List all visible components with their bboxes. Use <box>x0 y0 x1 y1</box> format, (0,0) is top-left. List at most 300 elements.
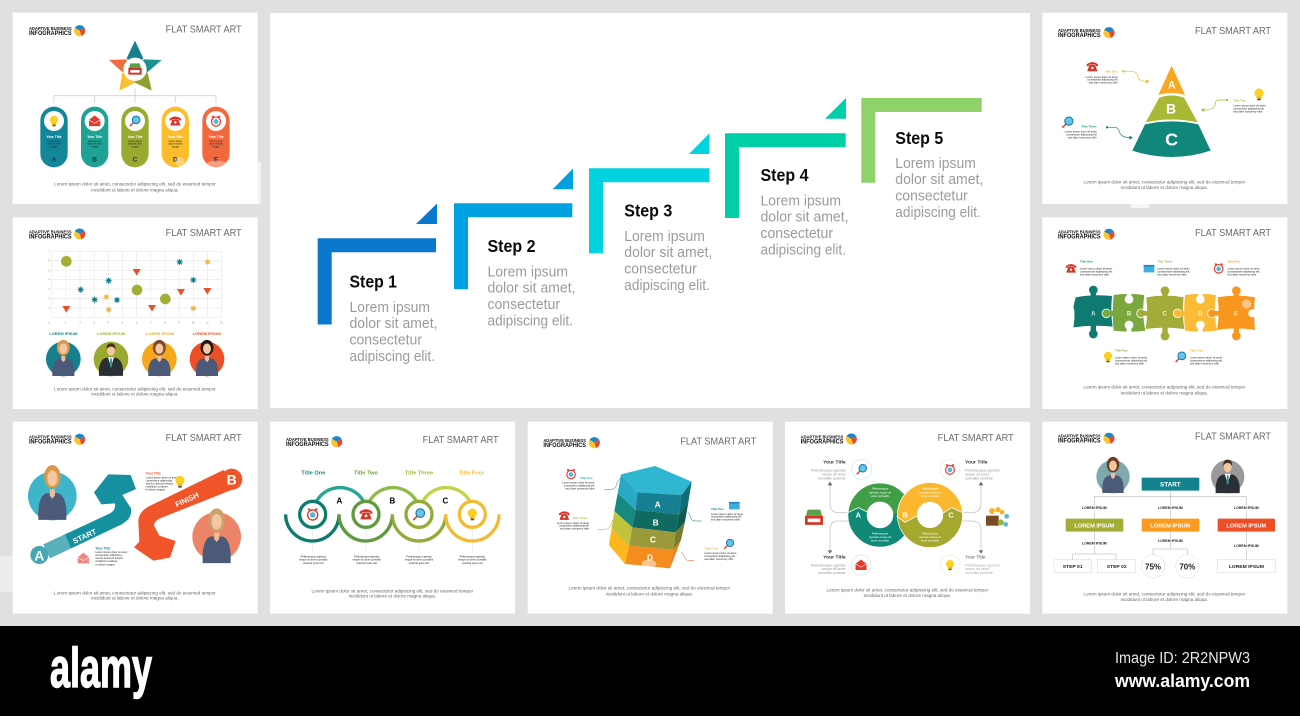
callout: bottom left <box>811 554 871 575</box>
pill B: dolor sit amet <box>88 143 102 146</box>
person 2: LOREM IPSUM <box>97 331 126 336</box>
scatter chart: 1 <box>48 306 50 310</box>
callout top: et dolore magna <box>146 488 165 492</box>
step 2: Step 2 <box>488 236 536 256</box>
callout: title one: consectetur adipiscing elit <box>1087 78 1118 82</box>
logo: INFOGRAPHICS <box>543 443 586 449</box>
callout: title one: consectetuer adipiscing elit, <box>1080 269 1113 273</box>
logo: ADAPTIVE BUSINESS <box>801 434 844 440</box>
callout: title two: Lorem ipsum dolor sit amet, <box>1115 355 1148 359</box>
callout: title one: consectetur adipiscing elit <box>564 483 595 487</box>
callout: top left <box>811 459 872 480</box>
step 5: dolor sit amet, <box>895 171 983 188</box>
person: man <box>1211 460 1244 493</box>
scatter chart: 7 <box>48 249 50 253</box>
callout: title three: Lorem ipsum dolor sit amet, <box>1157 267 1190 271</box>
logo <box>286 436 342 448</box>
scatter chart: 0 <box>48 320 50 324</box>
callout: top right: neque sit amet <box>965 472 989 476</box>
ring descriptions: Pellentesque egestas <box>406 555 432 559</box>
panel: linked rings <box>270 422 515 614</box>
title: FLAT SMART ART <box>680 436 756 447</box>
callout: top left: Pellentesque egestas <box>811 469 846 473</box>
star <box>109 41 162 91</box>
step labels: LOREM IPSUM <box>1229 564 1264 570</box>
panel: org chart with star <box>13 13 258 204</box>
prism <box>609 466 692 568</box>
step labels <box>1063 562 1264 571</box>
scatter chart: 4 <box>108 320 110 324</box>
callout: title two: sed diam nonummy nibh <box>1233 110 1263 114</box>
icon: magnifier <box>413 509 425 520</box>
logo: INFOGRAPHICS <box>1058 235 1101 241</box>
logo: INFOGRAPHICS <box>29 440 72 446</box>
callout: bottom right: Pellentesque egestas <box>965 563 1000 567</box>
ring descriptions: neque sit amet convallis <box>299 558 328 562</box>
scatter chart: 7 <box>150 320 152 324</box>
callout: title two: sed diam nonummy nibh <box>1115 361 1144 365</box>
step 5: adipiscing elit. <box>895 204 981 221</box>
pill E: E <box>214 157 218 164</box>
person 2 <box>94 331 128 376</box>
donut diagram: amet convallis <box>921 494 940 498</box>
icon: clock <box>308 509 318 520</box>
scatter chart: 2 <box>48 297 50 301</box>
callout bottom: incididunt ut labore <box>95 559 118 563</box>
step 4: Step 4 <box>760 165 809 185</box>
puzzle: E <box>1234 312 1238 318</box>
donut diagram: Pellentesque <box>872 487 889 491</box>
connectors <box>54 88 216 103</box>
connector labels: LOREM IPSUM <box>1082 506 1107 510</box>
title: FLAT SMART ART <box>423 435 499 446</box>
step 3: Lorem ipsum <box>624 228 705 245</box>
step 3: dolor sit amet, <box>624 244 712 261</box>
pill E: Your Title <box>208 135 224 139</box>
donut diagram: egestas neque sit <box>919 535 941 539</box>
step 2: Lorem ipsum <box>488 264 568 280</box>
step labels: STEP 02 <box>1107 564 1127 570</box>
step 4: consectetur <box>760 225 833 242</box>
callout: bottom left: Your Title <box>823 554 846 560</box>
image id: Image ID: 2R2NPW3 <box>1115 650 1250 667</box>
callout: title one: Lorem ipsum dolor sit amet <box>1086 75 1118 79</box>
logo: INFOGRAPHICS <box>1058 33 1101 39</box>
pill A: Your Title <box>46 135 62 139</box>
callout bottom: Lorem ipsum dolor sit amet <box>95 550 128 554</box>
pill D: feugiat <box>172 145 179 148</box>
connectors <box>1073 491 1246 560</box>
ring chain <box>286 488 499 552</box>
callout: top right: Pellentesque egestas <box>965 469 1000 473</box>
arrows <box>830 484 981 550</box>
callout: title one <box>1086 62 1150 85</box>
caption: Lorem ipsum dolor sit amet, consectetur adipiscing elit, sed do eiusmod tempor <box>54 182 216 187</box>
pill B: Your Title <box>87 135 102 139</box>
ring letters <box>336 496 448 505</box>
step 4: dolor sit amet, <box>760 208 848 226</box>
step 3: consectetur <box>624 260 697 278</box>
woman left <box>28 465 77 520</box>
scatter chart <box>48 249 223 324</box>
ring descriptions: pulvinar justo nisl <box>303 561 324 565</box>
caption: Lorem ipsum dolor sit amet, consectetur adipiscing elit, sed do eiusmod tempor <box>826 588 989 593</box>
person 4: LOREM IPSUM <box>193 331 221 336</box>
step 2: consectetur <box>488 296 560 313</box>
logo: ADAPTIVE BUSINESS <box>29 229 72 235</box>
callout: title five: consectetuer adipiscing elit, <box>1227 269 1260 273</box>
callout: bottom left: neque sit amet <box>822 567 846 571</box>
callout: title four: Lorem ipsum dolor sit amet, <box>1190 355 1223 359</box>
panel: scatter chart with people <box>13 217 258 409</box>
callout: title four <box>1176 349 1223 365</box>
callout top: Lorem ipsum dolor sit amet <box>146 475 178 479</box>
callout: title two: consectetuer adipiscing elit, <box>1115 358 1148 362</box>
callout: title three: sed diam nonummy nibh <box>1157 272 1187 276</box>
connector labels: LOREM IPSUM <box>1158 539 1183 543</box>
pill B: feugiat <box>91 145 99 148</box>
ring letters: A <box>336 496 342 505</box>
ring descriptions: neque sit amet convallis <box>405 558 434 562</box>
donut diagram: Pellentesque <box>922 531 939 535</box>
step boxes <box>1054 555 1275 578</box>
callout: title one: Lorem ipsum dolor sit amet <box>562 481 595 485</box>
callout: title one <box>562 469 595 490</box>
panel: start finish arrows <box>13 422 258 614</box>
pyramid: B <box>1166 101 1176 117</box>
panel: five steps <box>270 13 1030 408</box>
pill D: D <box>173 157 178 164</box>
ring titles: Title Four <box>459 470 485 476</box>
pill C: feugiat <box>131 145 139 148</box>
ring letters: B <box>389 496 395 505</box>
prism: A <box>655 499 661 509</box>
logo: INFOGRAPHICS <box>29 234 72 240</box>
pill B: B <box>92 157 97 164</box>
panel: overlapping donuts <box>785 422 1030 614</box>
person 4 <box>190 331 224 376</box>
caption line 2: incididunt ut labore et dolore magna aliqua. <box>91 392 179 397</box>
brand logo: alamy <box>50 636 152 699</box>
connector labels: LOREM IPSUM <box>1158 506 1183 510</box>
start arrow: START <box>71 527 98 546</box>
logo: ADAPTIVE BUSINESS <box>1058 28 1101 34</box>
callout: bottom left: convallis pulvinar <box>818 571 846 575</box>
callout bottom: Your Title <box>95 546 111 550</box>
ring descriptions: neque sit amet convallis <box>458 558 487 562</box>
pill A: feugiat <box>50 145 58 148</box>
donut diagram <box>845 482 963 548</box>
title: FLAT SMART ART <box>938 433 1014 444</box>
scatter chart: 11 <box>206 320 209 324</box>
callout: title four: consectetur adipiscing elit <box>704 554 735 558</box>
callout top: incididunt ut labore <box>146 484 168 488</box>
woman right <box>192 508 241 563</box>
callout bottom: et dolore magna <box>95 563 115 567</box>
callout: title three: Title Three <box>1082 124 1097 128</box>
start box <box>1142 478 1199 491</box>
pill A: dolor sit amet <box>47 143 61 146</box>
callout: title four: Title Four <box>1190 349 1204 353</box>
logo <box>1058 433 1115 445</box>
person 3 <box>142 331 177 376</box>
ring descriptions: pulvinar justo nisl <box>356 561 377 565</box>
pill D: dolor sit amet <box>168 143 183 146</box>
scatter chart: 1 <box>65 320 67 324</box>
step 3: Step 3 <box>624 200 673 220</box>
title: FLAT SMART ART <box>1195 26 1271 37</box>
pyramid: A <box>1168 79 1176 91</box>
step labels: STEP 01 <box>1063 564 1083 570</box>
pill D: Lorem ipsum <box>169 140 182 143</box>
caption: Lorem ipsum dolor sit amet, consectetur adipiscing elit, sed do eiusmod tempor <box>54 590 216 595</box>
logo: INFOGRAPHICS <box>286 442 329 448</box>
step 1 <box>318 204 438 365</box>
donut diagram: Pellentesque <box>872 531 889 535</box>
donut diagram: egestas neque sit <box>919 490 941 494</box>
scatter chart: 2 <box>79 320 81 324</box>
logo <box>1058 27 1115 39</box>
callout: title three <box>557 511 590 531</box>
step 4 <box>725 98 848 258</box>
puzzle <box>1073 286 1256 340</box>
logo: INFOGRAPHICS <box>1058 439 1101 445</box>
caption line 2: incididunt ut labore et dolore magna aliqua. <box>91 187 179 192</box>
caption: Lorem ipsum dolor sit amet, consectetur adipiscing elit, sed do eiusmod tempor <box>1083 591 1246 596</box>
step 2: adipiscing elit. <box>488 312 573 330</box>
panel: pyramid <box>1042 13 1287 204</box>
caption line 2: incididunt ut labore et dolore magna aliqua. <box>91 596 179 601</box>
puzzle: C <box>1163 312 1168 318</box>
logo <box>29 228 85 240</box>
pill D: Your Title <box>168 135 183 139</box>
scatter chart: 3 <box>48 287 50 291</box>
callout: title three: consectetur adipiscing elit <box>559 524 589 528</box>
puzzle: D <box>1198 312 1203 318</box>
pill C: Your Title <box>127 135 143 139</box>
callout lines <box>598 478 702 560</box>
ring descriptions: Pellentesque egestas <box>301 555 327 559</box>
callout: top right <box>940 459 1000 480</box>
caption line 2: incididunt ut labore et dolore magna aliqua. <box>606 591 693 596</box>
callout: title three: Lorem ipsum dolor sit amet <box>1065 130 1097 134</box>
connector labels <box>1078 506 1262 548</box>
caption line 2: incididunt ut labore et dolore magna aliqua. <box>349 594 436 599</box>
icon: bulb <box>468 509 477 520</box>
panel: puzzle <box>1042 217 1287 409</box>
box right: LOREM IPSUM <box>1226 523 1267 529</box>
callout: title one: sed diam nonummy nibh <box>1080 272 1109 276</box>
connector labels: LOREM IPSUM <box>1234 506 1259 510</box>
logo: INFOGRAPHICS <box>29 31 72 37</box>
callout: title three <box>1144 260 1190 276</box>
footer bar <box>0 626 1300 716</box>
callout: title three <box>1062 117 1133 140</box>
ring titles: Title One <box>301 470 325 476</box>
callout: title two: Title Two <box>1115 349 1128 353</box>
puzzle: A <box>1091 312 1096 318</box>
callout bottom: sed do eiusmod tempor <box>95 556 123 560</box>
title: FLAT SMART ART <box>1195 228 1271 239</box>
callout: title five: Lorem ipsum dolor sit amet, <box>1227 267 1260 271</box>
caption: Lorem ipsum dolor sit amet, consectetur adipiscing elit, sed do eiusmod tempor <box>54 386 216 391</box>
callout: title four: sed diam nonummy nibh <box>1190 361 1219 365</box>
ring descriptions: neque sit amet convallis <box>352 558 382 562</box>
step 3 <box>589 133 712 294</box>
finish arrow: FINISH <box>174 490 201 509</box>
callout: title three: sed diam nonummy nibh <box>1068 136 1097 140</box>
logo: ADAPTIVE BUSINESS <box>1058 434 1101 440</box>
scatter chart: 5 <box>122 320 124 324</box>
callout: title three: consectetur adipiscing elit <box>1066 133 1097 137</box>
caption: Lorem ipsum dolor sit amet, consectetur adipiscing elit, sed do eiusmod tempor <box>568 586 731 591</box>
callout: title one <box>1066 260 1113 276</box>
pill E: Lorem ipsum <box>209 140 223 143</box>
callout: title four: consectetuer adipiscing elit, <box>1190 358 1223 362</box>
donut diagram: Pellentesque <box>922 487 939 491</box>
title: FLAT SMART ART <box>1195 432 1271 443</box>
scatter chart: 12 <box>220 320 223 324</box>
callout: title two: sed diam nonummy nibh <box>711 518 740 522</box>
logo <box>801 433 857 445</box>
callout: title two: Lorem ipsum dolor sit amet <box>711 512 743 516</box>
callout: title one: Title One <box>1080 260 1093 264</box>
ring descriptions: Pellentesque egestas <box>354 555 380 559</box>
pill C <box>121 107 149 167</box>
person 1: LOREM IPSUM <box>49 331 78 336</box>
pyramid: C <box>1165 129 1178 149</box>
scatter chart: 4 <box>48 278 50 282</box>
logo <box>1058 229 1115 241</box>
scatter chart: 5 <box>48 268 50 272</box>
callout: title four <box>704 539 737 561</box>
logo: ADAPTIVE BUSINESS <box>29 26 72 32</box>
ring letters: C <box>442 496 448 505</box>
callout: title two: consectetur adipiscing elit <box>711 515 742 519</box>
box middle: LOREM IPSUM <box>1150 523 1191 529</box>
callout bottom: consectetur adipiscing <box>95 553 122 557</box>
box left <box>1066 519 1123 532</box>
pill B <box>81 107 108 167</box>
step 5: Step 5 <box>895 128 944 148</box>
ring descriptions <box>299 555 487 565</box>
ring titles <box>301 470 485 476</box>
callout: top right: Your Title <box>965 460 988 466</box>
step 1: Lorem ipsum <box>350 299 430 316</box>
step 1: consectetur <box>350 332 422 348</box>
ring descriptions: Pellentesque egestas <box>460 555 486 559</box>
callout: title one: sed diam nonummy nibh <box>565 486 595 490</box>
logo: ADAPTIVE BUSINESS <box>29 435 72 441</box>
step 2: dolor sit amet, <box>488 280 576 296</box>
person 3: LOREM IPSUM <box>146 331 175 336</box>
callout: title two: Title Two <box>711 507 724 511</box>
callout: title two: Lorem ipsum dolor sit amet <box>1233 104 1266 108</box>
callout: top left: neque sit amet <box>822 472 846 476</box>
step 1: Step 1 <box>350 272 397 292</box>
prism: B <box>653 517 659 527</box>
step 4: adipiscing elit. <box>760 242 846 258</box>
finish arrow <box>134 469 242 561</box>
icon: shop <box>805 510 823 525</box>
donut diagram: B <box>902 511 908 520</box>
caption line 2: incididunt ut labore et dolore magna aliqua. <box>1121 185 1208 190</box>
callout: title two: consectetur adipiscing elit <box>1233 107 1264 111</box>
pill A: Lorem ipsum <box>47 140 61 143</box>
callout: title two: Title Two <box>1233 98 1246 102</box>
pill A <box>40 107 68 167</box>
callout: bottom right: convallis pulvinar <box>965 571 994 575</box>
step labels: 75% <box>1145 562 1161 571</box>
step 1: adipiscing elit. <box>350 348 435 365</box>
caption line 2: incididunt ut labore et dolore magna aliqua. <box>1121 597 1208 602</box>
icon: phone <box>360 509 372 519</box>
start arrow: A <box>34 547 44 563</box>
title: FLAT SMART ART <box>166 24 242 35</box>
caption: Lorem ipsum dolor sit amet, consectetur adipiscing elit, sed do eiusmod tempor <box>1083 179 1246 184</box>
step labels: 70% <box>1179 562 1195 571</box>
callout: title one: sed diam nonummy nibh <box>1089 81 1118 85</box>
scatter chart: 8 <box>164 320 166 324</box>
callout: title five <box>1214 260 1260 276</box>
box right <box>1218 519 1275 532</box>
caption line 2: incididunt ut labore et dolore magna aliqua. <box>1121 390 1208 395</box>
donut diagram: C <box>948 511 954 520</box>
callout: bottom left: Pellentesque egestas <box>811 563 846 567</box>
callout top <box>146 471 185 492</box>
pill E <box>202 107 230 167</box>
website: www.alamy.com <box>1114 671 1250 691</box>
finish arrow: B <box>227 471 237 487</box>
ring titles: Title Three <box>405 470 433 476</box>
scatter chart: 10 <box>192 320 195 324</box>
ring descriptions: pulvinar justo nisl <box>409 561 430 565</box>
donut diagram: egestas neque sit <box>869 490 891 494</box>
callout: bottom right <box>940 554 1000 575</box>
connector labels: LOREM IPSUM <box>1082 542 1107 546</box>
title: FLAT SMART ART <box>166 228 242 239</box>
person: woman <box>1096 457 1130 493</box>
scatter chart: 3 <box>93 320 95 324</box>
callout: title five: Title Five <box>1227 260 1241 264</box>
scatter chart: 9 <box>178 320 180 324</box>
logo: ADAPTIVE BUSINESS <box>1058 230 1101 236</box>
donut diagram: amet convallis <box>871 494 890 498</box>
pill C: C <box>133 157 138 164</box>
step 5: Lorem ipsum <box>895 155 976 172</box>
callout: title one: Lorem ipsum dolor sit amet, <box>1080 267 1113 271</box>
callout: title four: Title Four <box>704 546 719 550</box>
step 4: Lorem ipsum <box>760 192 841 210</box>
callout: bottom right: Your Title <box>965 554 986 560</box>
start box: START <box>1160 481 1181 488</box>
logo <box>29 434 85 446</box>
callout top: Your Title <box>146 471 161 475</box>
step 5: consectetur <box>895 188 968 204</box>
donut diagram: amet convallis <box>871 539 890 543</box>
start arrow <box>30 474 136 564</box>
callout: title three: Title Three <box>1157 260 1173 264</box>
connector labels: LOREM IPSUM <box>1234 544 1259 548</box>
pill D <box>162 107 189 167</box>
pill C: Lorem ipsum <box>128 140 142 143</box>
callout: title two <box>711 502 743 522</box>
arrow heads <box>828 482 983 554</box>
box left: LOREM IPSUM <box>1074 523 1115 529</box>
callout: title three: Title Three <box>572 516 588 520</box>
title: FLAT SMART ART <box>166 433 242 444</box>
callout top: consectetur adipiscing <box>146 478 172 482</box>
